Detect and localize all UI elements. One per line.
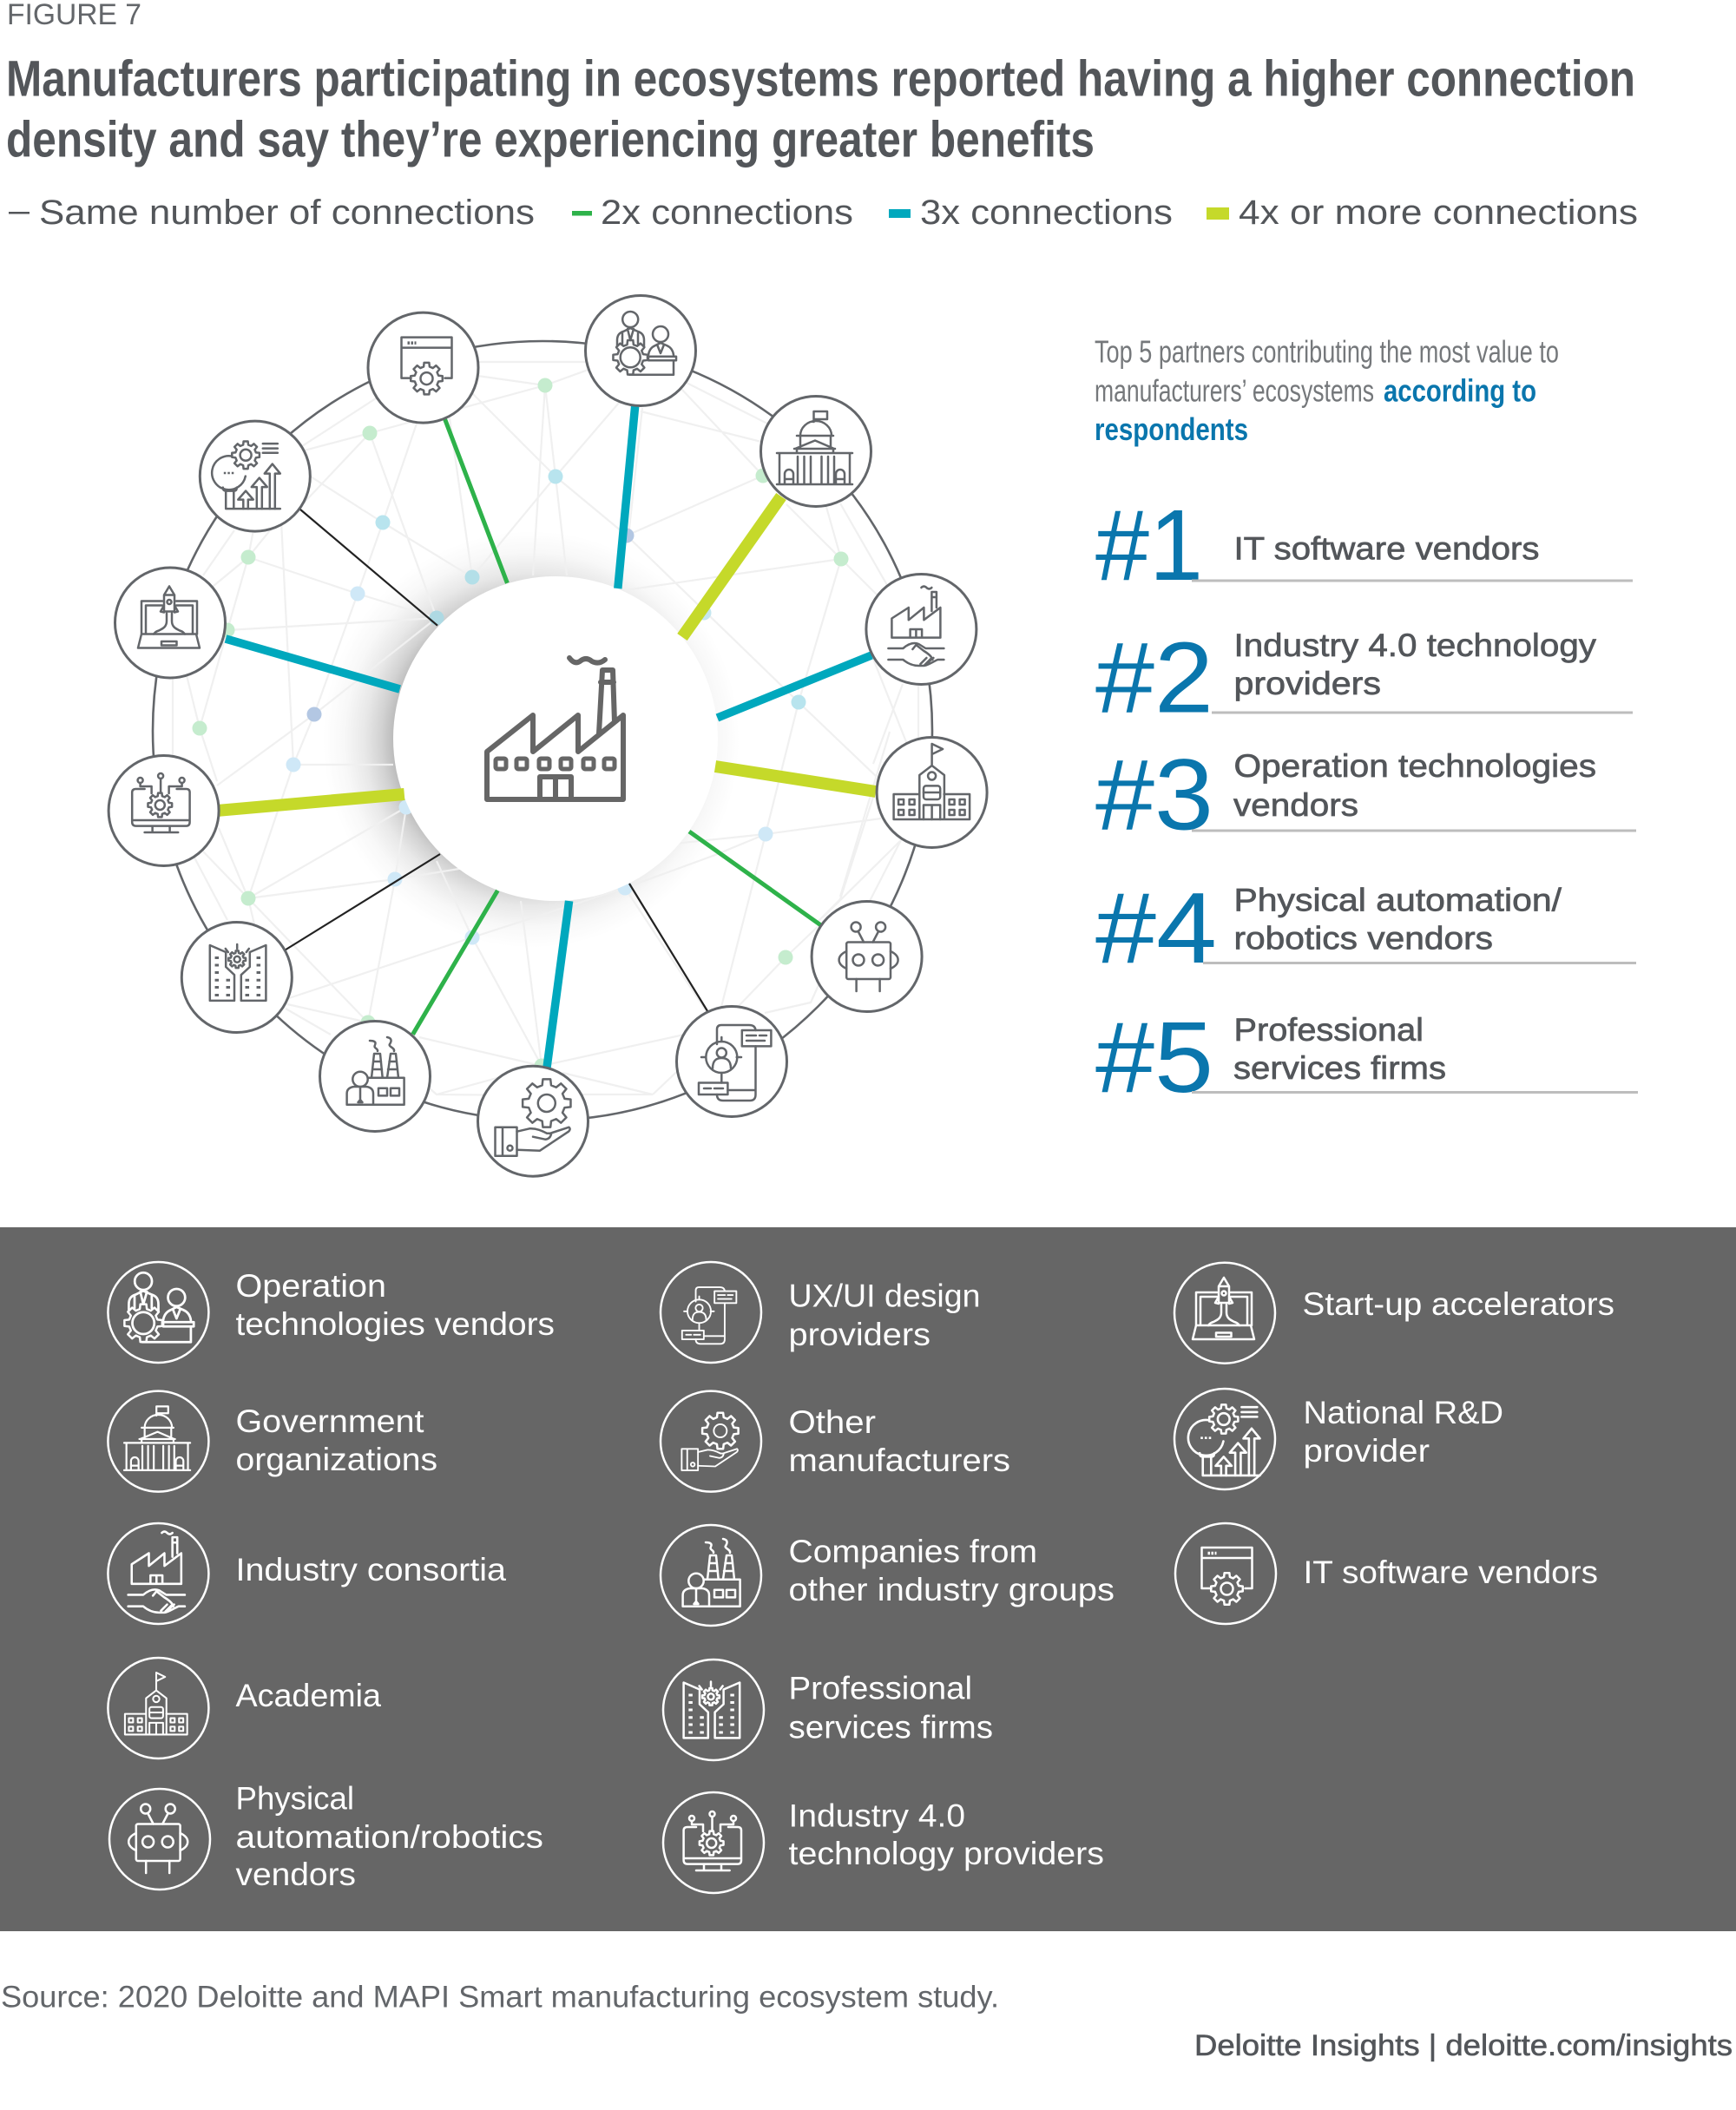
intro text: top 5 partners: Top 5 partners contributing the most value to	[1095, 334, 1559, 370]
center circle	[393, 576, 718, 901]
node: Government organizations	[760, 396, 871, 507]
title: density and say they’re experiencing greater benefits	[6, 111, 1095, 168]
legend item: Government organizations: Government	[236, 1403, 424, 1439]
node: IT software vendors	[368, 312, 478, 423]
legend item: Academia	[108, 1658, 381, 1758]
node: Industry 4.0 technology providers	[108, 755, 219, 866]
legend item: IT software vendors	[1175, 1523, 1598, 1624]
rank 5: #5	[1095, 1001, 1213, 1114]
node: UX/UI design providers	[677, 1007, 786, 1116]
network diagram	[108, 295, 987, 1176]
legend item: Companies from other industry groups: other industry groups	[788, 1572, 1115, 1607]
legend item: Professional services firms: services firms	[788, 1710, 993, 1745]
legend item: Start-up accelerators: Start-up accelerators	[1302, 1286, 1614, 1322]
intro text: top 5 partners: according to	[1384, 373, 1536, 408]
rank 5	[1095, 1001, 1638, 1114]
rank 5: Professional	[1234, 1012, 1424, 1048]
rank 3: vendors	[1233, 787, 1358, 823]
legend item: Government organizations	[108, 1391, 437, 1492]
rank 4: Physical automation/	[1234, 883, 1562, 918]
rank 3: #3	[1095, 739, 1213, 851]
legend item: National R&D provider: provider	[1304, 1433, 1430, 1469]
rank 4: #4	[1095, 871, 1217, 984]
connection legend	[9, 194, 1638, 232]
mesh lines	[173, 344, 922, 1095]
legend item: UX/UI design providers	[661, 1262, 981, 1363]
center shadow	[323, 531, 740, 948]
node: Professional services firms	[181, 922, 292, 1033]
legend item: Operation technologies vendors: technologies vendors	[236, 1306, 555, 1342]
legend item: Industry 4.0 technology providers: technology providers	[788, 1836, 1104, 1871]
legend item: Physical automation/robotics vendors: automation/robotics	[236, 1819, 543, 1855]
legend item: Government organizations: organizations	[236, 1442, 437, 1477]
node: Industry consortia	[866, 575, 976, 684]
node: Other manufacturers	[477, 1066, 589, 1176]
legend item: UX/UI design providers: providers	[788, 1317, 930, 1352]
source note: Source: 2020 Deloitte and MAPI Smart manufacturing ecosystem study.	[1, 1981, 999, 2015]
rank 4: robotics vendors	[1234, 921, 1493, 956]
network dots	[193, 378, 849, 1073]
node: Academia	[877, 738, 987, 847]
legend item: Companies from other industry groups	[661, 1525, 1115, 1626]
legend item: Industry consortia	[108, 1523, 506, 1624]
legend item: Physical automation/robotics vendors: vendors	[236, 1857, 356, 1892]
connection spokes	[219, 404, 876, 1068]
legend item: UX/UI design providers: UX/UI design	[788, 1278, 981, 1314]
rank 1: IT software vendors	[1234, 531, 1540, 567]
rank 2	[1095, 621, 1633, 734]
rank 2: #2	[1095, 621, 1213, 734]
legend item: Physical automation/robotics vendors: Physical	[236, 1781, 354, 1817]
connection legend: 2x connections	[601, 194, 853, 232]
legend item: National R&D provider: National R&D	[1304, 1395, 1503, 1430]
credit line: Deloitte Insights | deloitte.com/insights	[1194, 2029, 1733, 2062]
outer ring	[153, 341, 932, 1121]
intro text: top 5 partners: respondents	[1095, 411, 1248, 447]
icon: central factory	[487, 658, 623, 799]
node: Companies from other industry groups	[319, 1021, 431, 1132]
legend item: Companies from other industry groups: Companies from	[788, 1534, 1037, 1569]
panel: partner legend	[0, 1227, 1736, 1931]
legend item: Other manufacturers	[661, 1391, 1010, 1492]
intro text: top 5 partners	[1095, 334, 1559, 447]
rank 5: services firms	[1233, 1050, 1446, 1086]
node: National R&D provider	[200, 421, 310, 531]
legend item: Industry 4.0 technology providers	[663, 1792, 1104, 1893]
rank 2: Industry 4.0 technology	[1234, 628, 1597, 663]
node: Physical automation/robotics vendors	[812, 901, 922, 1012]
rank 2: providers	[1234, 666, 1381, 701]
rank 1	[1095, 489, 1633, 601]
rank 1: #1	[1095, 489, 1203, 601]
connection legend: 3x connections	[920, 194, 1173, 232]
title	[6, 50, 1635, 168]
legend item: Other manufacturers: manufacturers	[788, 1443, 1010, 1478]
legend item: Other manufacturers: Other	[788, 1404, 876, 1440]
intro text: top 5 partners: manufacturers’ ecosystems	[1095, 373, 1374, 408]
legend item: Operation technologies vendors: Operation	[236, 1268, 386, 1304]
connection legend: Same number of connections	[39, 194, 535, 232]
legend item: Start-up accelerators	[1174, 1263, 1614, 1364]
legend item: Academia: Academia	[236, 1678, 381, 1713]
legend item: Physical automation/robotics vendors	[109, 1781, 543, 1892]
rank 3: Operation technologies	[1234, 748, 1596, 784]
rank 4	[1095, 871, 1636, 984]
node: Operation technologies vendors	[585, 295, 696, 406]
rank 3	[1095, 739, 1636, 851]
legend item: Professional services firms: Professional	[788, 1670, 972, 1706]
legend item: Industry 4.0 technology providers: Industry 4.0	[788, 1798, 965, 1833]
legend item: IT software vendors: IT software vendors	[1304, 1555, 1598, 1590]
legend item: Professional services firms	[663, 1660, 993, 1760]
connection legend: 4x or more connections	[1239, 194, 1638, 232]
legend item: Operation technologies vendors	[108, 1262, 555, 1363]
legend item: National R&D provider	[1174, 1389, 1503, 1489]
legend item: Industry consortia: Industry consortia	[236, 1552, 506, 1587]
node: Start-up accelerators	[115, 568, 226, 678]
